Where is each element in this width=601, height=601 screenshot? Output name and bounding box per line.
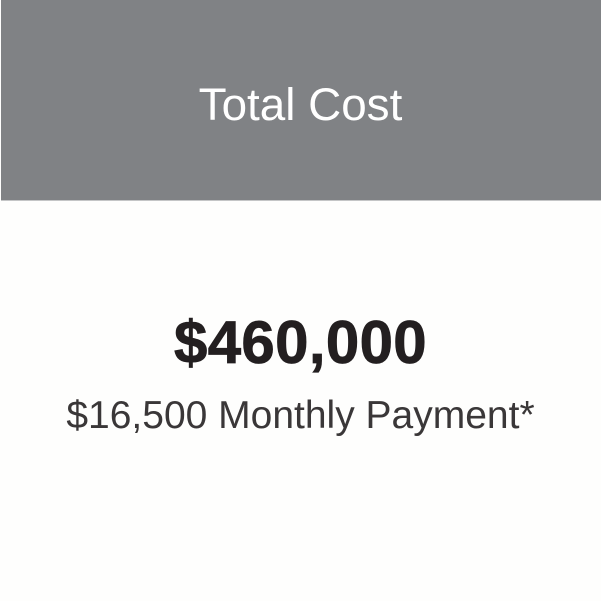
header panel: Total Cost bbox=[1, 0, 601, 201]
total cost figure: $460,000 bbox=[174, 309, 427, 376]
heading: Total Cost: Total Cost bbox=[199, 79, 402, 130]
monthly payment text: $16,500 Monthly Payment* bbox=[66, 394, 535, 437]
